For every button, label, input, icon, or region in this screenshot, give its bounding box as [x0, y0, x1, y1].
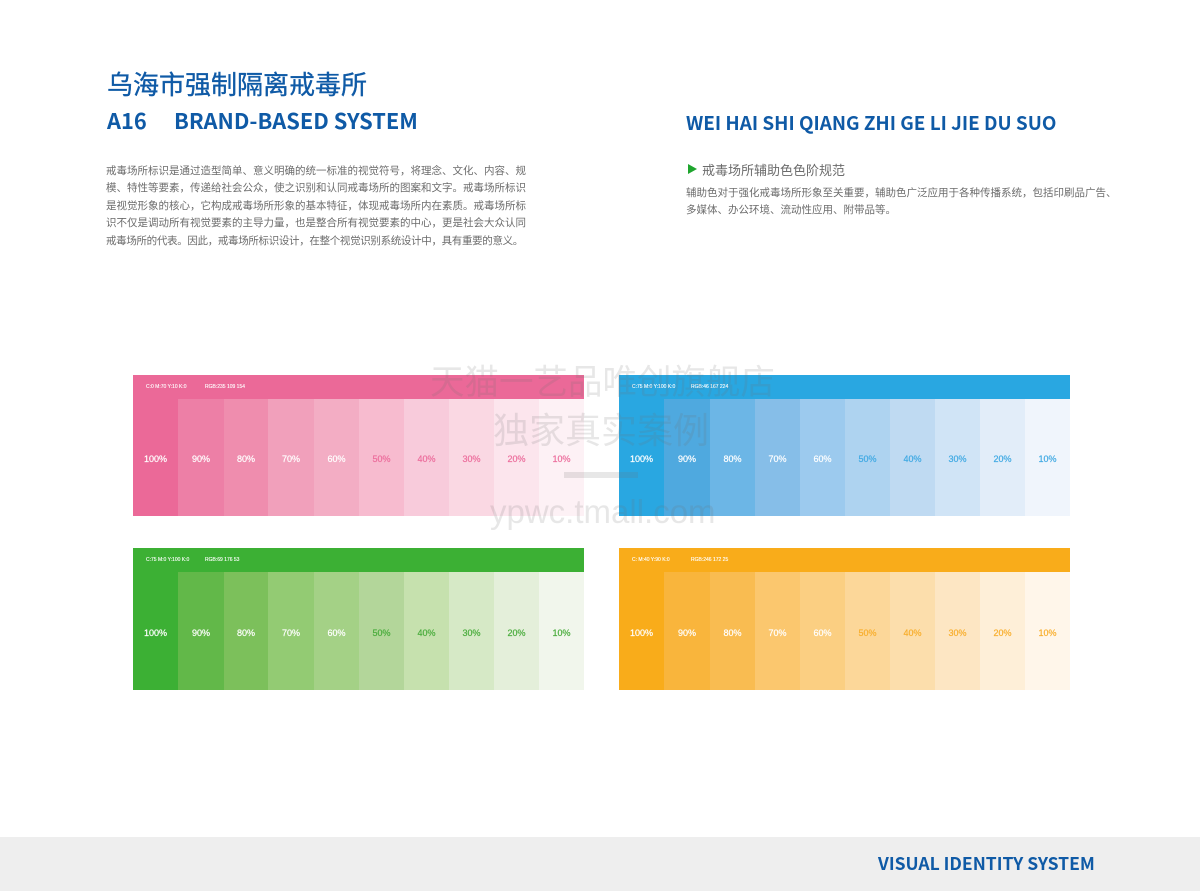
swatches: green tints: 40% [417, 628, 436, 638]
heading: A16 brand-based system: BRAND-BASED SYSTEM [174, 105, 418, 136]
swatches: green tints [133, 572, 584, 690]
colour values: blue [619, 375, 1070, 399]
colour values: green: RGB:69 176 53 [205, 557, 239, 563]
swatches: orange tints: 90% [678, 628, 696, 638]
swatches: blue tints: 10% [1038, 454, 1056, 464]
panel: orange colour scale [619, 548, 1070, 690]
colour values: blue: RGB:46 167 224 [691, 384, 728, 390]
swatches: orange tints: 50% [858, 628, 876, 638]
text block: logo description: 模、特性等要素，传递给社会公众，使之识别和认同戒毒场所的图案和文字。戒毒场所标识 [106, 180, 526, 195]
swatches: blue tints: 100% [630, 454, 653, 464]
swatches: green tints: 50% [372, 628, 390, 638]
swatches: blue tints: 80% [723, 454, 742, 464]
watermark: shop name overlay: 独家真实案例 [493, 402, 709, 454]
panel: green colour scale [133, 548, 584, 690]
title: chinese organisation name: 乌海市强制隔离戒毒所 [107, 65, 367, 102]
swatches: green tints: 60% [327, 628, 346, 638]
text block: auxiliary colour description: 辅助色对于强化戒毒场所形象至关重要，辅助色广泛应用于各种传播系统，包括印刷品广告、 [686, 184, 1116, 200]
text block: logo description: 识不仅是调动所有视觉要素的主导力量，也是整合所有视觉要素的中心，更是社会大众认同 [106, 215, 526, 230]
swatches: pink tints: 30% [462, 454, 480, 464]
swatches: orange tints: 60% [813, 628, 832, 638]
colour values: orange: C: M:40 Y:90 K:0 [632, 557, 670, 563]
text block: logo description: 戒毒场所的代表。因此，戒毒场所标识设计，在整个视觉识别系统设计中，具有重要的意义。 [106, 232, 523, 248]
swatches: orange tints: 80% [723, 628, 742, 638]
swatches: pink tints: 60% [327, 454, 346, 464]
subheading: auxiliary colour scale specification: 戒毒场所辅助色色阶规范 [702, 160, 845, 179]
swatches: orange tints: 40% [903, 628, 922, 638]
swatches: pink tints: 100% [144, 454, 167, 464]
colour values: orange: RGB:246 172 25 [691, 557, 728, 563]
colour values: pink: RGB:235 109 154 [205, 384, 245, 390]
swatches: orange tints: 70% [768, 628, 786, 638]
swatches: blue tints: 60% [813, 454, 832, 464]
swatches: pink tints: 10% [552, 454, 570, 464]
swatches: pink tints: 70% [282, 454, 300, 464]
swatches: blue tints [619, 399, 1070, 516]
swatches: green tints: 30% [462, 628, 480, 638]
watermark: shop name overlay: 天猫一艺品唯创旗舰店 [430, 354, 775, 404]
swatches: blue tints: 50% [858, 454, 876, 464]
colour values: green [133, 548, 584, 572]
colour values: pink: C:0 M:70 Y:10 K:0 [146, 384, 186, 390]
colour values: orange [619, 548, 1070, 572]
text block: logo description [106, 162, 526, 248]
icon: green triangle bullet [688, 164, 697, 174]
swatches: blue tints: 70% [768, 454, 786, 464]
footer band [0, 837, 1200, 891]
swatches: pink tints: 80% [237, 454, 255, 464]
footer text: visual identity system: VISUAL IDENTITY SYSTEM [878, 851, 1095, 876]
swatches: orange tints: 10% [1038, 628, 1056, 638]
heading: pinyin organisation name: WEI HAI SHI QIANG ZHI GE LI JIE DU SUO [686, 109, 1056, 136]
panel: blue colour scale [619, 375, 1070, 516]
swatches: green tints: 70% [282, 628, 300, 638]
watermark: shop name overlay [430, 354, 775, 530]
swatches: blue tints: 90% [678, 454, 696, 464]
swatches: green tints: 20% [507, 628, 526, 638]
swatches: green tints: 100% [144, 628, 167, 638]
swatches: blue tints: 20% [993, 454, 1012, 464]
swatches: pink tints: 40% [417, 454, 436, 464]
colour values: blue: C:75 M:0 Y:100 K:0 [632, 384, 675, 390]
swatches: orange tints: 100% [630, 628, 653, 638]
swatches: pink tints: 20% [507, 454, 526, 464]
swatches: pink tints: 90% [192, 454, 210, 464]
text block: logo description: 是视觉形象的核心，它构成戒毒场所形象的基本特征，体现戒毒场所内在素质。戒毒场所标 [106, 198, 526, 212]
swatches: orange tints: 30% [948, 628, 966, 638]
swatches: blue tints: 30% [948, 454, 966, 464]
swatches: pink tints: 50% [372, 454, 390, 464]
swatches: green tints: 90% [192, 628, 210, 638]
panel: pink colour scale [133, 375, 584, 516]
swatches: green tints: 10% [552, 628, 570, 638]
watermark: shop name overlay: ypwc.tmall.com [490, 493, 716, 530]
text block: auxiliary colour description [686, 184, 1116, 217]
colour values: green: C:75 M:0 Y:100 K:0 [146, 557, 189, 563]
heading: A16 brand-based system: A16 [107, 105, 147, 136]
swatches: green tints: 80% [237, 628, 255, 638]
swatches: orange tints [619, 572, 1070, 690]
swatches: orange tints: 20% [993, 628, 1012, 638]
text block: auxiliary colour description: 多媒体、办公环境、流动性应用、附带品等。 [686, 202, 896, 217]
swatches: blue tints: 40% [903, 454, 922, 464]
swatches: pink tints [133, 399, 584, 516]
text block: logo description: 戒毒场所标识是通过造型简单、意义明确的统一标准的视觉符号，将理念、文化、内容、规 [106, 162, 526, 178]
colour values: pink [133, 375, 584, 399]
